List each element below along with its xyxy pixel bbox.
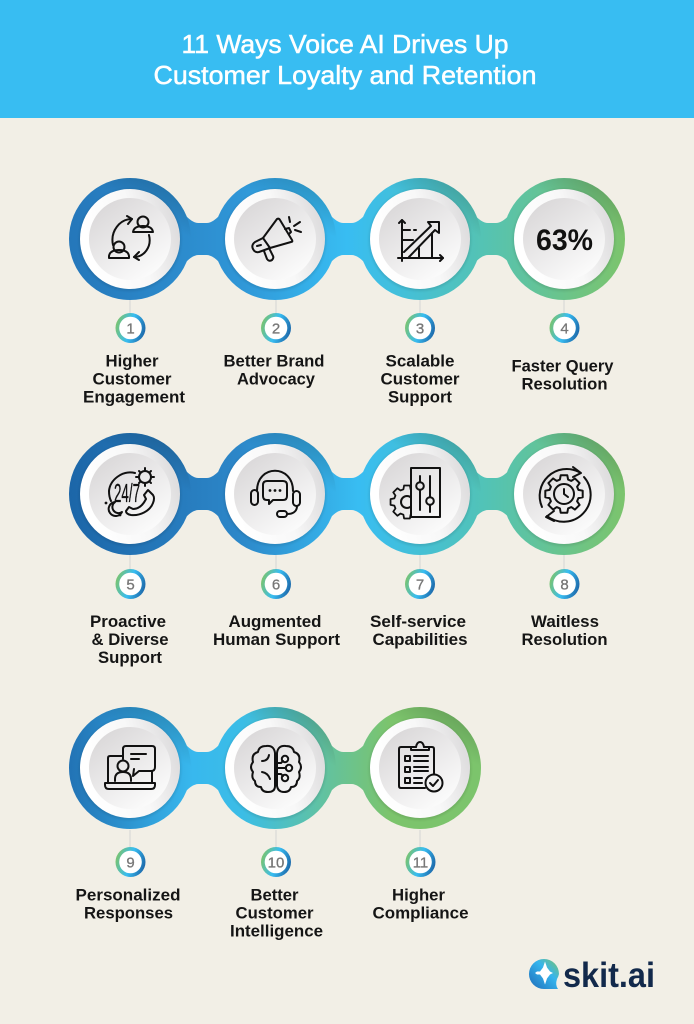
label 7: Self-service xyxy=(370,612,466,631)
item 1: Higher Customer Engagement xyxy=(69,178,191,406)
number badge 1 xyxy=(116,313,146,343)
label 5: Proactive xyxy=(90,612,166,631)
number badge 6: 6 xyxy=(272,576,280,594)
number badge 5: 5 xyxy=(126,576,135,594)
number badge 11 xyxy=(406,847,436,877)
number badge 3: 3 xyxy=(416,320,424,338)
label 10 xyxy=(230,886,323,940)
icon: laptop with chat xyxy=(105,746,155,789)
number badge 7 xyxy=(405,569,435,599)
item 9: Personalized Responses xyxy=(69,707,191,922)
label 8: Waitless xyxy=(531,612,599,631)
item 2: Better Brand Advocacy xyxy=(214,178,336,388)
item 3: Scalable Customer Support xyxy=(359,178,481,406)
label 5 xyxy=(90,612,168,667)
header banner xyxy=(0,0,694,118)
icon: megaphone xyxy=(252,217,301,261)
label 10: Customer xyxy=(236,904,314,922)
label 3: Scalable xyxy=(386,352,454,370)
title xyxy=(154,29,536,90)
icon: checklist clipboard xyxy=(399,742,442,792)
label 5: Support xyxy=(98,648,162,667)
item 11: Higher Compliance xyxy=(359,707,481,922)
item 5: Proactive & Diverse Support xyxy=(69,433,191,667)
item 4: Faster Query Resolution xyxy=(503,178,625,394)
title: 11 Ways Voice AI Drives Up xyxy=(182,29,508,59)
icon: logo speech bubble xyxy=(529,959,559,989)
item 6: Augmented Human Support xyxy=(213,433,340,649)
item 10: Better Customer Intelligence xyxy=(214,707,336,940)
number badge 3 xyxy=(405,313,435,343)
number badge 2 xyxy=(261,313,291,343)
label 3: Support xyxy=(388,388,452,406)
number badge 8: 8 xyxy=(560,576,569,594)
label 6: Human Support xyxy=(213,630,340,649)
label 11 xyxy=(372,886,468,922)
label 3: Customer xyxy=(380,370,460,388)
label 6 xyxy=(213,612,340,649)
number badge 4 xyxy=(550,313,580,343)
number badge 10 xyxy=(261,847,291,877)
label 5: & Diverse xyxy=(92,630,168,649)
icon: gear and sliders xyxy=(391,468,440,518)
number badge 2: 2 xyxy=(272,320,280,338)
number badge 10: 10 xyxy=(268,854,284,872)
row 2 gradient chain xyxy=(69,433,625,555)
icon: 24/7 phone xyxy=(105,468,154,516)
label 1: Higher xyxy=(106,352,159,370)
item 8: Waitless Resolution xyxy=(503,433,625,649)
label 2: Better Brand xyxy=(224,352,324,370)
icon: 24/7 phone: 24/7 xyxy=(114,478,140,508)
row 1 gradient chain xyxy=(69,178,625,300)
icon: 63 percent: 63% xyxy=(536,224,593,257)
label 11: Higher xyxy=(392,886,445,904)
number badge 9 xyxy=(116,847,146,877)
label 1 xyxy=(83,352,185,406)
label 6: Augmented xyxy=(228,612,322,631)
label 3 xyxy=(380,352,460,406)
row 3 gradient chain xyxy=(69,707,481,829)
label 9: Responses xyxy=(84,904,173,922)
label 11: Compliance xyxy=(372,904,468,922)
number badge 6 xyxy=(261,569,291,599)
label 1: Customer xyxy=(92,370,172,388)
number badge 7: 7 xyxy=(416,576,424,594)
icon: headset with chat bubble xyxy=(251,471,300,517)
label 4: Faster Query xyxy=(512,356,614,376)
item 7: Self-service Capabilities xyxy=(359,433,481,649)
label 7 xyxy=(370,612,468,649)
label 4 xyxy=(512,356,614,394)
label 2 xyxy=(224,352,324,388)
label 2: Advocacy xyxy=(237,370,316,388)
wordmark: skit.ai xyxy=(563,956,655,995)
logo: skit.ai xyxy=(529,956,655,995)
label 10: Intelligence xyxy=(230,922,323,940)
label 4: Resolution xyxy=(522,374,608,394)
icon: brain circuit xyxy=(251,746,301,792)
icon: growth chart xyxy=(398,220,443,261)
number badge 4: 4 xyxy=(560,320,569,338)
number badge 11: 11 xyxy=(413,854,428,872)
label 10: Better xyxy=(250,886,299,904)
label 7: Capabilities xyxy=(372,630,468,649)
number badge 1: 1 xyxy=(126,320,135,338)
label 8 xyxy=(522,612,608,649)
number badge 8 xyxy=(550,569,580,599)
label 1: Engagement xyxy=(83,388,185,406)
label 9: Personalized xyxy=(76,886,180,904)
icon: gear clock xyxy=(540,467,591,522)
label 8: Resolution xyxy=(522,630,608,649)
icon: people exchange xyxy=(109,216,153,260)
title: Customer Loyalty and Retention xyxy=(154,60,536,90)
label 9 xyxy=(76,886,180,922)
number badge 9: 9 xyxy=(126,854,135,872)
number badge 5 xyxy=(116,569,146,599)
